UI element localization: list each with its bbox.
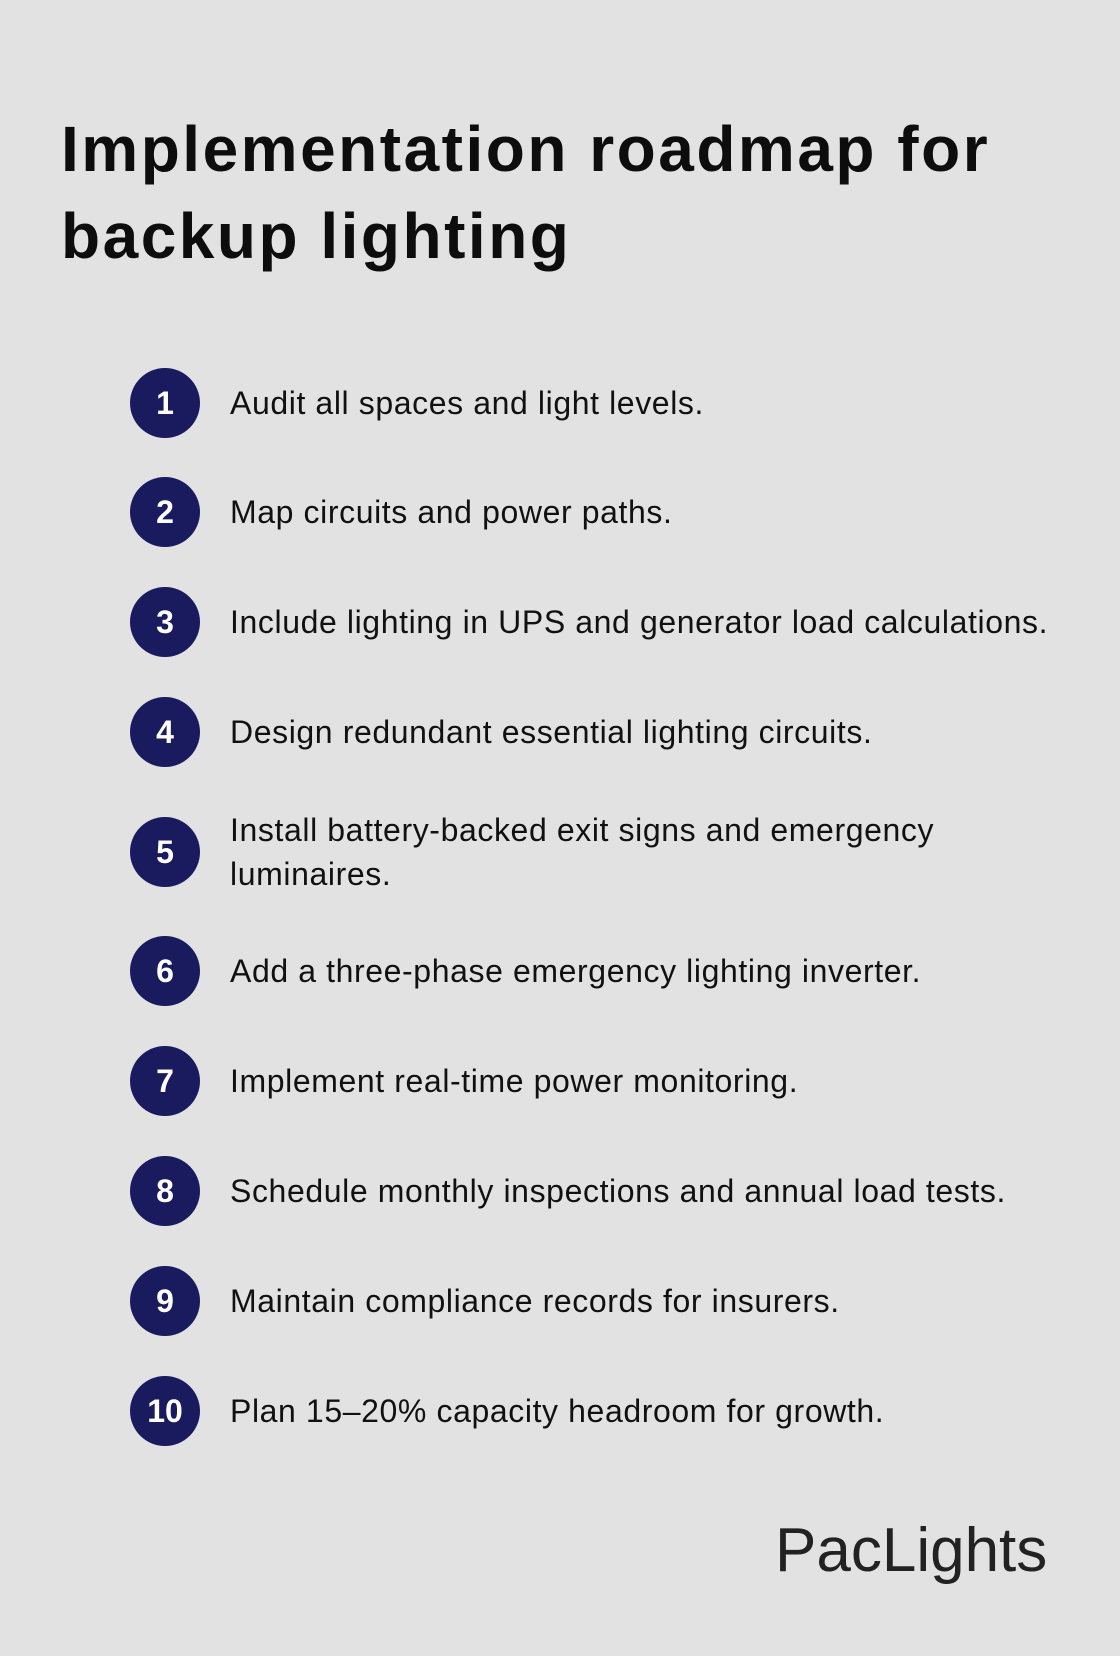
step 9: Maintain compliance records for insurers. <box>230 1283 840 1319</box>
step 8: Schedule monthly inspections and annual load tests. <box>230 1173 1006 1209</box>
title: Implementation roadmap for <box>61 113 990 185</box>
step 8: 8 <box>156 1173 174 1209</box>
step 1: Audit all spaces and light levels. <box>230 385 704 421</box>
step 4: Design redundant essential lighting circuits. <box>230 714 872 750</box>
step 5: Install battery-backed exit signs and emergency <box>230 812 934 848</box>
step 8 <box>130 1156 1006 1226</box>
step 5: 5 <box>156 834 174 870</box>
step 3: 3 <box>156 604 174 640</box>
title: backup lighting <box>61 200 571 272</box>
step 2 <box>130 477 672 547</box>
step 9 <box>130 1266 840 1336</box>
step 7 <box>130 1046 798 1116</box>
step 4 <box>130 697 872 767</box>
step 10: 10 <box>147 1393 183 1429</box>
step 3: Include lighting in UPS and generator load calculations. <box>230 604 1048 640</box>
step 5 <box>130 812 934 892</box>
step 2: 2 <box>156 494 174 530</box>
logo: PacLights <box>775 1516 1047 1585</box>
step 6 <box>130 936 921 1006</box>
step 3 <box>130 587 1048 657</box>
step 7: Implement real-time power monitoring. <box>230 1063 798 1099</box>
step 10: Plan 15–20% capacity headroom for growth. <box>230 1393 884 1429</box>
title <box>61 113 990 272</box>
step 9: 9 <box>156 1283 174 1319</box>
step 5: luminaires. <box>230 856 391 892</box>
step 1 <box>130 368 704 438</box>
step 10 <box>130 1376 884 1446</box>
step 7: 7 <box>156 1063 174 1099</box>
step 6: 6 <box>156 953 174 989</box>
step 2: Map circuits and power paths. <box>230 494 672 530</box>
step 6: Add a three-phase emergency lighting inverter. <box>230 953 921 989</box>
step 4: 4 <box>156 714 174 750</box>
step 1: 1 <box>156 385 174 421</box>
